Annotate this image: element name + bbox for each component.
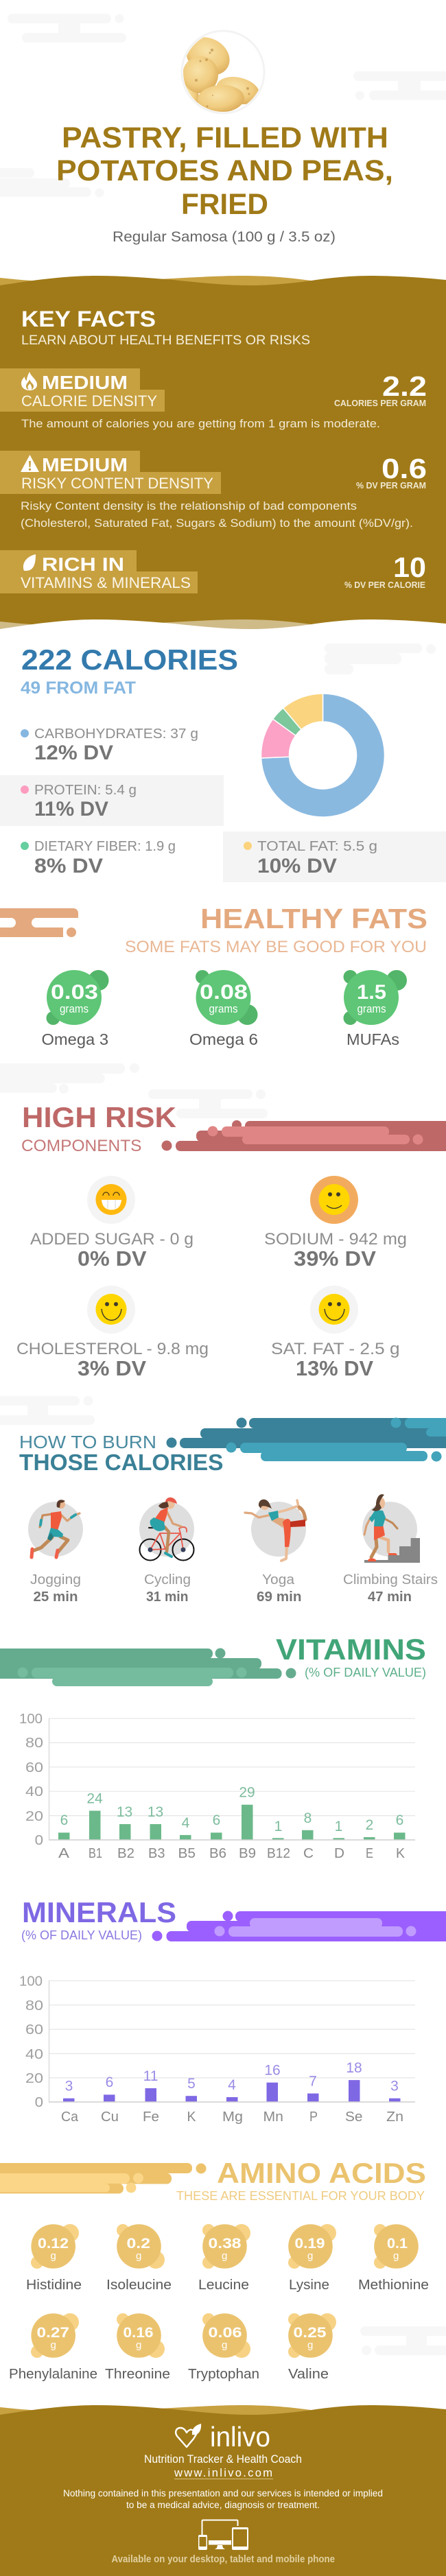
title: PASTRY, FILLED WITH [62,121,388,154]
bar chart: vitamins: B6 [209,1846,226,1861]
bar chart: vitamins: 2 [366,1817,373,1833]
bar chart: minerals: 3 [65,2079,73,2094]
panel: minerals [19,1896,446,2125]
bar chart: minerals: 16 [264,2062,281,2079]
badge: mufas: grams [357,1002,386,1015]
bar chart: vitamins: 13 [148,1804,163,1820]
fact: risky content density: (Cholesterol, Saturated Fat, Sugars & Sodium) to the amount (%DV/gr). [21,517,413,530]
amino: leucine: g [222,2250,227,2262]
bar chart: vitamins: 6 [60,1812,68,1828]
icon: leaf [23,554,36,571]
amino: leucine: Leucine [198,2278,249,2293]
activity: climbing stairs: Climbing Stairs [343,1572,438,1587]
legend: dietary fiber: 8% DV [34,855,103,877]
bar chart: vitamins: 1 [274,1819,282,1834]
badge: omega 6: 0.08 [200,981,248,1004]
heading: key facts: KEY FACTS [21,307,156,331]
panel: amino acids [0,2157,446,2382]
heading: minerals: (% OF DAILY VALUE) [21,1928,142,1942]
amino: valine: g [307,2339,313,2351]
activity: yoga [245,1500,306,1605]
amino: histidine: 0.12 [38,2236,69,2252]
amino: threonine: g [136,2339,141,2351]
donut chart [261,694,385,817]
activity: yoga: Yoga [262,1572,295,1587]
bar chart: vitamins: C [303,1846,314,1861]
bar chart: vitamins: 1 [335,1819,342,1834]
amino: valine: 0.25 [294,2325,327,2341]
icon: warning triangle [21,455,39,472]
bar chart: minerals: 4 [228,2077,236,2093]
panel: healthy fats [0,903,427,1118]
fact: calorie density: CALORIES PER GRAM [334,398,426,408]
fact: calorie density: The amount of calories you are getting from 1 gram is moderate. [21,417,380,430]
badge: omega 3: grams [60,1002,89,1015]
bar chart: minerals [19,1974,415,2125]
heading: amino acids: THESE ARE ESSENTIAL FOR YOUR BODY [176,2188,425,2203]
bar chart: minerals: Fe [143,2110,159,2125]
legend: total fat: TOTAL FAT: 5.5 g [257,839,377,854]
panel: calories [0,643,446,882]
bar chart: minerals: Ca [61,2110,79,2125]
bar chart: vitamins: D [334,1846,344,1861]
panel: footer [0,2405,446,2576]
amino: histidine [26,2224,82,2293]
bar chart: minerals: 11 [143,2068,158,2084]
amino: histidine: Histidine [26,2278,82,2293]
item: cholesterol: CHOLESTEROL - 9.8 mg [16,1340,209,1358]
badge: mufas: 1.5 [357,981,386,1004]
activity: yoga: 69 min [257,1590,302,1605]
badge: omega 6: Omega 6 [189,1030,258,1048]
item: saturated fat: 13% DV [296,1356,373,1380]
item: sodium: SODIUM - 942 mg [264,1230,407,1249]
heading: calories [21,643,238,698]
legend: carbohydrates: 12% DV [34,742,113,764]
title: FRIED [181,188,268,221]
bar chart: minerals: 5 [187,2076,196,2092]
bar chart: minerals: 100 [19,1974,43,1989]
amino: methionine: 0.1 [387,2236,408,2252]
heading: high risk [21,1101,176,1155]
panel: how to burn calories [0,1396,446,1605]
icon: flame [21,372,37,390]
logo: inlivo: inlivo [210,2421,270,2453]
amino: valine [288,2313,336,2382]
item: added sugar: ADDED SUGAR - 0 g [30,1230,193,1249]
legend: total fat: 10% DV [257,855,337,877]
badge: omega 3: 0.03 [51,981,98,1004]
heading: vitamins: VITAMINS [276,1633,426,1666]
amino: threonine [105,2313,170,2382]
amino: lysine: g [307,2250,313,2262]
item: added sugar: 0% DV [78,1246,147,1271]
activity: climbing stairs: 47 min [368,1590,412,1605]
figure: yoga pose [245,1500,305,1561]
activity: cycling [139,1498,194,1605]
bar chart: vitamins: 24 [86,1791,103,1807]
bar chart: vitamins: 8 [304,1810,312,1826]
item: added sugar [30,1176,193,1271]
item: cholesterol [16,1286,209,1380]
amino: tryptophan: g [222,2339,227,2351]
amino: tryptophan [188,2313,259,2382]
decoration: brush bars [152,1911,446,1941]
fact: rich in vitamins and minerals: % DV PER CALORIE [344,580,425,590]
bar chart: vitamins [19,1712,415,1861]
amino: isoleucine [106,2224,172,2293]
amino: lysine [288,2224,336,2293]
legend: total fat [244,839,377,877]
heading: key facts: LEARN ABOUT HEALTH BENEFITS OR RISKS [21,333,310,348]
heading: amino acids [176,2157,426,2203]
activity: jogging [28,1500,83,1605]
fact: calorie density: CALORIE DENSITY [21,392,157,410]
activity: cycling: Cycling [144,1572,191,1587]
bar chart: vitamins: 80 [25,1736,43,1751]
amino: phenylalanine: g [51,2339,56,2351]
decoration: brush bars [166,1417,446,1461]
amino: methionine [358,2224,429,2293]
availability note: Available on your desktop, tablet and mobile phone [111,2553,335,2565]
fact: rich in vitamins and minerals: 10 [393,552,426,583]
amino: methionine: g [393,2250,399,2262]
fact: rich in vitamins and minerals [0,550,426,593]
decoration: brush bars [0,1648,296,1686]
bar chart: minerals: 18 [346,2060,362,2076]
fact: calorie density [0,368,427,430]
bar chart: minerals: 40 [25,2047,43,2062]
heading: calories: 49 FROM FAT [21,678,136,698]
decoration: brush bars [0,2163,206,2194]
bar chart: minerals: 3 [390,2079,399,2094]
fact: risky content density: MEDIUM [42,454,128,475]
bar chart: vitamins: 13 [117,1804,132,1820]
badge: mufas [343,970,407,1048]
fact: risky content density: Risky Content density is the relationship of bad components [21,499,357,512]
amino: valine: Valine [288,2367,329,2382]
bar chart: minerals: Mn [263,2110,283,2125]
amino: threonine: Threonine [105,2367,170,2382]
amino: isoleucine: g [136,2250,141,2262]
legend: carbohydrates: CARBOHYDRATES: 37 g [34,726,198,742]
panel: key facts [0,276,446,639]
bar chart: vitamins: 0 [35,1833,43,1848]
fact: risky content density: % DV PER GRAM [356,480,426,491]
bar chart: vitamins: K [396,1846,406,1861]
badge: omega 3: Omega 3 [41,1030,108,1048]
amino: lysine: Lysine [289,2278,329,2293]
heading: vitamins [276,1633,426,1679]
icon: devices [198,2520,248,2550]
badge: mufas: MUFAs [347,1030,399,1048]
bar chart: minerals: Zn [386,2110,403,2125]
fact: rich in vitamins and minerals: VITAMINS & MINERALS [21,574,191,591]
bar chart: minerals: 7 [309,2073,317,2090]
amino: threonine: 0.16 [124,2325,154,2341]
amino: lysine: 0.19 [295,2236,325,2252]
amino: phenylalanine: Phenylalanine [9,2367,97,2382]
subtitle: Regular Samosa (100 g / 3.5 oz) [113,229,336,245]
logo: inlivo [176,2421,270,2453]
bar chart: vitamins: 60 [25,1760,43,1775]
legend: dietary fiber [21,839,176,877]
amino: methionine: Methionine [358,2278,429,2293]
bar chart: minerals: K [187,2110,196,2125]
heading: amino acids: AMINO ACIDS [217,2157,426,2189]
bar chart: vitamins: E [366,1846,373,1861]
heading: calories: 222 CALORIES [21,643,238,676]
badge: omega 6: grams [209,1002,237,1015]
amino: tryptophan: 0.06 [209,2325,242,2341]
bar chart: vitamins: B3 [148,1846,165,1861]
bar chart: minerals: Se [345,2110,362,2125]
decoration: brush bars [0,908,93,938]
heading: high risk: HIGH RISK [22,1101,176,1133]
website link: www.inlivo.com [174,2467,272,2479]
activity: cycling: 31 min [146,1590,188,1605]
bar chart: vitamins: B1 [89,1846,102,1861]
heading: high risk: COMPONENTS [21,1137,141,1155]
bar chart: minerals: Mg [222,2110,243,2125]
heading: minerals [21,1896,176,1942]
disclaimer: Nothing contained in this presentation and our services is intended or implied [63,2488,383,2498]
amino: phenylalanine: 0.27 [37,2325,69,2341]
bar chart: vitamins: 4 [182,1815,190,1831]
bar chart: vitamins: 100 [19,1712,43,1727]
bar chart: minerals: 80 [25,1998,43,2013]
badge: omega 3 [41,970,108,1048]
figure: runner [32,1513,80,1557]
heading: vitamins: (% OF DAILY VALUE) [305,1666,426,1679]
disclaimer: to be a medical advice, diagnosis or treatment. [126,2500,320,2510]
bar chart: vitamins: B2 [117,1846,134,1861]
title: POTATOES AND PEAS, [56,154,393,187]
activity: climbing stairs [343,1494,438,1605]
badge: omega 6 [189,970,258,1048]
legend: dietary fiber: DIETARY FIBER: 1.9 g [34,839,176,854]
item: sodium: 39% DV [294,1246,376,1271]
heading: how to burn those calories: THOSE CALORIES [19,1450,224,1475]
fact: risky content density: RISKY CONTENT DENSITY [21,475,213,492]
tagline: Nutrition Tracker & Health Coach [144,2453,302,2466]
bar chart: vitamins: 40 [25,1784,43,1799]
bar chart: minerals: 0 [35,2095,43,2110]
bar chart: vitamins: B5 [178,1846,196,1861]
panel: vitamins [0,1633,426,1861]
bar chart: vitamins: B12 [267,1846,290,1861]
legend: protein [21,783,137,820]
fact: calorie density: MEDIUM [42,372,128,393]
heading: key facts [21,307,310,348]
bar chart: vitamins: 20 [25,1809,43,1824]
figure: cyclist [140,1511,193,1560]
heading: minerals: MINERALS [22,1896,176,1928]
legend: protein: PROTEIN: 5.4 g [34,783,137,798]
fact: rich in vitamins and minerals: RICH IN [42,554,124,575]
bar chart: minerals: 6 [106,2075,113,2090]
icon: potatoes [178,30,264,114]
amino: leucine [198,2224,250,2293]
bar chart: vitamins: 6 [396,1812,403,1828]
amino: isoleucine: Isoleucine [106,2278,172,2293]
heading: healthy fats: SOME FATS MAY BE GOOD FOR YOU [125,938,427,956]
fact: risky content density: 0.6 [382,453,427,484]
bar chart: minerals: Cu [101,2110,119,2125]
legend: carbohydrates [21,726,198,764]
activity: jogging: 25 min [33,1590,78,1605]
item: cholesterol: 3% DV [78,1356,146,1380]
bar chart: vitamins: 6 [213,1812,220,1828]
bar chart: vitamins: B9 [239,1846,256,1861]
fact: risky content density [0,451,427,530]
bar chart: minerals: P [309,2110,318,2125]
panel: header [58,30,391,244]
item: saturated fat: SAT. FAT - 2.5 g [271,1340,399,1358]
bar chart: vitamins: A [58,1846,70,1861]
heading: healthy fats [125,903,427,956]
item: sodium [264,1176,407,1271]
disclaimer [63,2488,383,2510]
panel: high risk components [16,1101,446,1380]
heading: how to burn those calories [19,1432,224,1475]
figure: stairs and climber [364,1538,420,1563]
legend: protein: 11% DV [34,798,108,820]
amino: phenylalanine [9,2313,97,2382]
bar chart: minerals: 20 [25,2071,43,2086]
decoration: brush bars [162,1120,446,1151]
bar chart: minerals: 60 [25,2022,43,2037]
bar chart: vitamins: 29 [239,1785,255,1800]
fact: calorie density: 2.2 [382,370,427,402]
amino: tryptophan: Tryptophan [188,2367,259,2382]
activity: jogging: Jogging [30,1572,81,1587]
heading: healthy fats: HEALTHY FATS [200,903,427,934]
item: saturated fat [271,1286,399,1380]
amino: leucine: 0.38 [209,2236,242,2252]
amino: histidine: g [51,2250,56,2262]
amino: isoleucine: 0.2 [126,2236,150,2252]
title [56,121,393,221]
heading: how to burn those calories: HOW TO BURN [19,1432,156,1452]
